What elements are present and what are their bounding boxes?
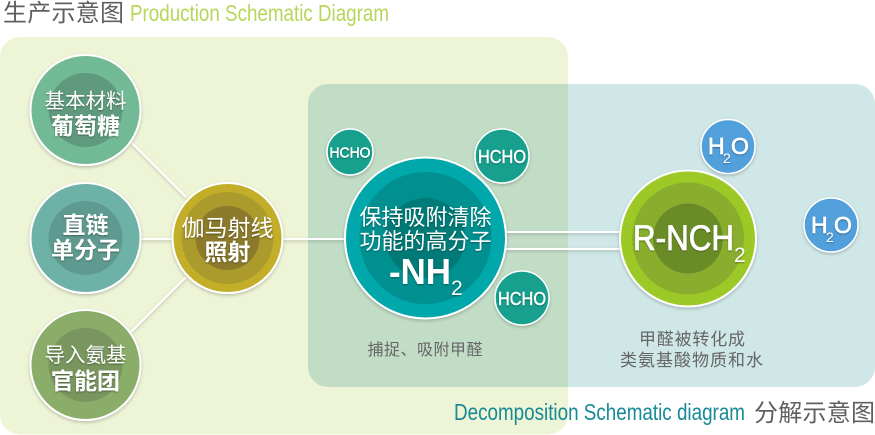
- node: functional group: 官能团: [51, 368, 120, 394]
- node: linear molecule: 直链: [62, 212, 108, 238]
- node: functional group: [30, 310, 140, 420]
- caption: conversion: 甲醛被转化成: [639, 330, 745, 349]
- molecule: HCHO upper: [475, 129, 529, 183]
- node: gamma irradiation: [172, 183, 282, 293]
- node: linear molecule: 单分子: [51, 237, 120, 263]
- node: glucose: [30, 55, 140, 165]
- node: amino polymer: [345, 158, 506, 318]
- molecule: HCHO upper: HCHO: [478, 147, 526, 167]
- node: gamma irradiation: 伽马射线: [182, 215, 274, 241]
- molecule: H2O upper: O: [731, 133, 749, 159]
- molecule: H2O right: 2: [826, 229, 834, 245]
- panel: production: [0, 37, 568, 434]
- molecule: H2O right: [804, 198, 858, 252]
- molecule: H2O right: H: [811, 212, 828, 238]
- title: decomposition: 分解示意图: [754, 400, 875, 427]
- molecule: H2O upper: H: [708, 133, 725, 159]
- title: production: 生产示意图: [3, 0, 124, 27]
- title: decomposition: Decomposition Schematic diagram: [454, 399, 745, 425]
- molecule: HCHO small: [327, 129, 373, 175]
- node: glucose: 基本材料: [44, 90, 126, 113]
- node: linear molecule: [30, 183, 140, 293]
- molecule: HCHO lower: HCHO: [498, 289, 546, 309]
- molecule: H2O right: O: [834, 212, 852, 238]
- molecule: H2O upper: [701, 120, 755, 174]
- node: R-NCH2: R-NCH: [633, 219, 734, 258]
- node: glucose: 葡萄糖: [51, 113, 120, 139]
- node: amino polymer: 保持吸附清除: [360, 205, 492, 230]
- panel: decomposition: [308, 84, 875, 387]
- node: amino polymer: 2: [451, 277, 463, 300]
- title: production: Production Schematic Diagram: [130, 0, 389, 26]
- molecule: HCHO lower: [495, 271, 549, 325]
- node: functional group: 导入氨基: [44, 344, 126, 367]
- node: amino polymer: -NH: [389, 251, 451, 292]
- node: R-NCH2: 2: [734, 244, 746, 267]
- caption: capture: 捕捉、吸附甲醛: [368, 341, 482, 359]
- molecule: H2O upper: 2: [723, 150, 731, 166]
- caption: conversion: 类氨基酸物质和水: [620, 351, 763, 370]
- title: production: [3, 0, 389, 27]
- molecule: HCHO small: HCHO: [330, 144, 370, 162]
- caption: conversion: [620, 330, 763, 370]
- connector lines: [130, 143, 620, 333]
- node: gamma irradiation: 照射: [204, 239, 250, 265]
- node: R-NCH2: [620, 170, 756, 306]
- node: amino polymer: 功能的高分子: [360, 229, 492, 254]
